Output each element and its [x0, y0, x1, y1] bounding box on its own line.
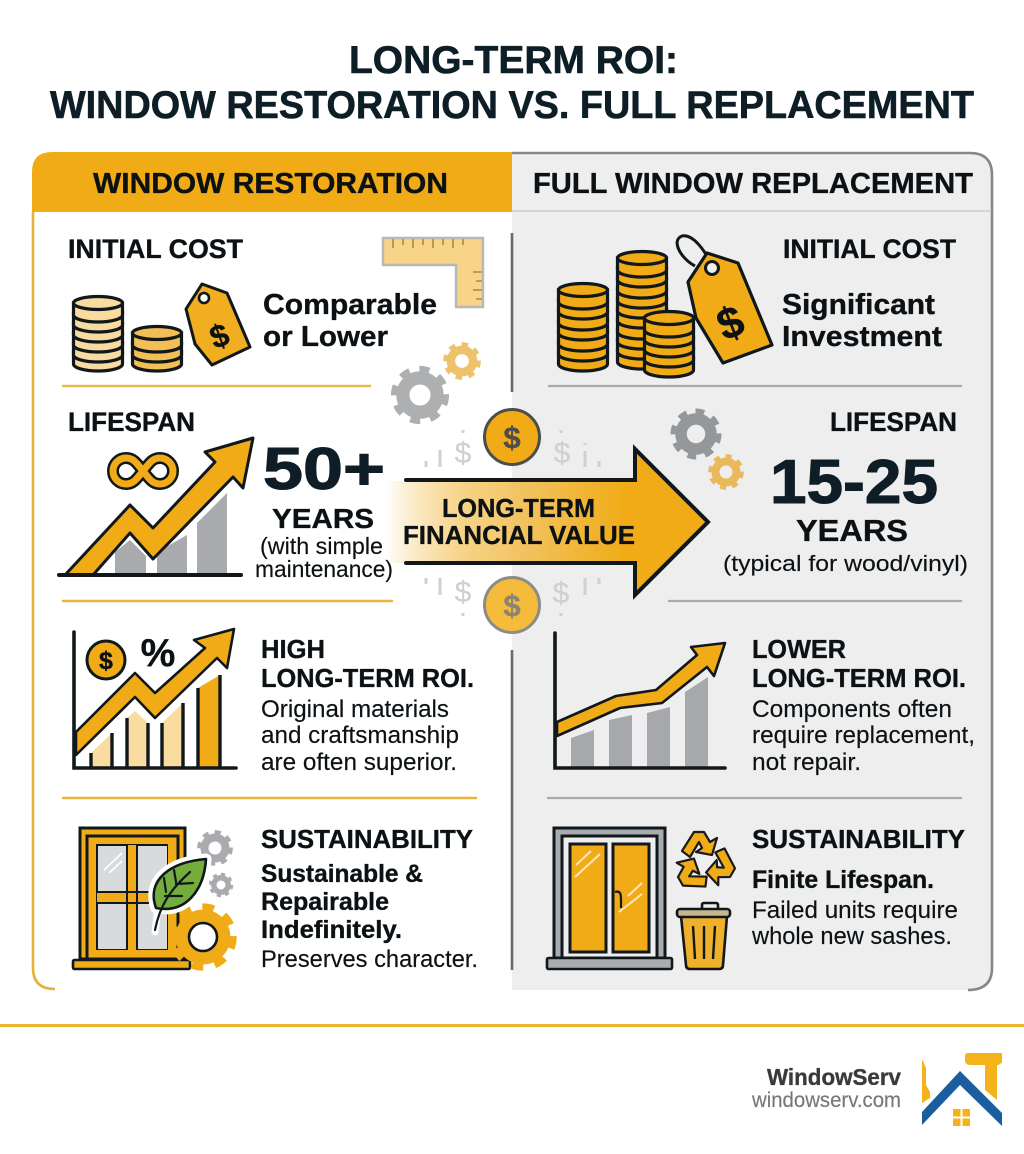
text: high long-term roi: Original materials	[261, 696, 449, 723]
title: LONG-TERM ROI:	[349, 39, 678, 82]
arrow label: LONG-TERM	[442, 493, 595, 523]
coin: top: $	[503, 420, 521, 455]
text: sustainability restoration: Indefinitely.	[261, 916, 402, 944]
icon: grey and gold gears (restoration)	[395, 345, 478, 420]
icon: replacement window	[547, 828, 672, 969]
text: high long-term roi	[261, 634, 474, 776]
stat: 50+ years: 50+	[263, 436, 385, 502]
icon: leaf	[154, 859, 206, 932]
icon: price tag (restoration): $	[205, 316, 234, 356]
arrow shape	[385, 449, 708, 595]
text: lower long-term roi	[752, 634, 975, 776]
text: high long-term roi: LONG-TERM ROI.	[261, 663, 474, 693]
arrow label	[403, 493, 635, 550]
icon: price tag (restoration)	[186, 284, 250, 365]
panel header: window restoration: WINDOW RESTORATION	[93, 168, 448, 200]
stat: 15-25 years: YEARS	[796, 513, 908, 548]
footer brand text: windowserv.com	[751, 1089, 901, 1112]
text: lower long-term roi: not repair.	[752, 749, 861, 776]
text: lower long-term roi: LONG-TERM ROI.	[752, 663, 966, 693]
text: high long-term roi: HIGH	[261, 634, 325, 664]
text: high long-term roi: and craftsmanship	[261, 722, 459, 749]
icon: dollar coin: $	[99, 647, 113, 675]
stat: 50+ years	[255, 436, 393, 582]
text: high long-term roi: are often superior.	[261, 749, 457, 776]
text: significant investment	[782, 289, 942, 353]
text: lower long-term roi: Components often	[752, 696, 952, 723]
chart: high long-term roi	[74, 629, 236, 768]
stat: 50+ years: maintenance)	[255, 556, 393, 582]
text: sustainability replacement: Failed units require	[752, 897, 958, 924]
text: sustainability restoration: SUSTAINABILITY	[261, 824, 473, 854]
title: WINDOW RESTORATION VS. FULL REPLACEMENT	[50, 84, 974, 127]
stat: 50+ years: (with simple	[260, 533, 383, 559]
arrow label: FINANCIAL VALUE	[403, 520, 635, 550]
text: sustainability replacement: Finite Lifespan.	[752, 866, 934, 894]
icon: recycling symbol	[672, 832, 741, 896]
chart: lower long-term roi	[555, 633, 725, 768]
text: comparable or lower	[263, 289, 437, 353]
text: sustainability replacement	[751, 824, 965, 950]
icon: coin stacks (restoration)	[74, 296, 182, 371]
stat: 15-25 years	[723, 448, 968, 576]
faded dollar signs and ticks: $	[554, 437, 571, 470]
heading: restoration lifespan: LIFESPAN	[68, 407, 195, 437]
chart: lifespan growth arrow	[59, 438, 253, 575]
icon: percent sign: %	[141, 632, 175, 675]
text: significant investment: Significant	[782, 289, 935, 321]
stat: 50+ years: YEARS	[272, 503, 374, 534]
icon: gold gear	[174, 908, 232, 966]
icon: grey and gold gears (replacement)	[674, 412, 741, 487]
heading: replacement initial cost: INITIAL COST	[783, 234, 956, 264]
icon: dollar coin	[87, 641, 125, 679]
icon: trash can	[677, 903, 730, 969]
icon: price tag (replacement): $	[710, 296, 751, 351]
icon: carpenter square ruler	[383, 238, 483, 307]
icon: coin stacks (replacement)	[558, 252, 694, 377]
text: significant investment: Investment	[782, 321, 942, 353]
text: sustainability restoration	[261, 824, 478, 973]
footer brand text: WindowServ	[767, 1064, 901, 1090]
stat: 15-25 years: 15-25	[770, 448, 938, 517]
text: sustainability replacement: whole new sashes.	[751, 923, 952, 950]
faded dollar signs and ticks	[426, 430, 599, 616]
coin: bottom	[484, 578, 540, 632]
stat: 15-25 years: (typical for wood/vinyl)	[723, 551, 968, 576]
text: lower long-term roi: LOWER	[752, 634, 846, 664]
text: sustainability restoration: Sustainable &	[261, 860, 423, 888]
text: sustainability replacement: SUSTAINABILITY	[752, 824, 965, 854]
icon: grey gears	[200, 833, 232, 896]
panel header: window restoration	[32, 152, 512, 212]
icon: infinity symbol	[113, 458, 173, 484]
faded dollar signs and ticks: $	[455, 576, 472, 609]
icon: wooden window with leaf and gears	[73, 828, 232, 969]
text: comparable or lower: or Lower	[263, 321, 388, 353]
faded dollar signs and ticks: $	[455, 437, 472, 470]
heading: replacement lifespan: LIFESPAN	[830, 407, 957, 437]
text: comparable or lower: Comparable	[263, 289, 437, 321]
coin: top	[484, 410, 540, 464]
footer rule	[0, 1024, 1024, 1027]
text: sustainability restoration: Repairable	[261, 888, 389, 916]
logo: house and tools	[922, 1053, 1002, 1126]
panel: window restoration	[32, 152, 512, 989]
panel header: full window replacement: FULL WINDOW REPLACEMENT	[533, 168, 973, 200]
coin: bottom: $	[503, 588, 521, 623]
text: sustainability restoration: Preserves character.	[261, 946, 478, 973]
central arrow: long-term financial value	[385, 410, 708, 632]
icon: price tag (replacement)	[677, 236, 772, 363]
faded dollar signs and ticks: $	[553, 577, 570, 610]
title	[50, 39, 974, 127]
text: lower long-term roi: require replacement,	[752, 722, 975, 749]
footer brand text	[751, 1064, 901, 1112]
heading: restoration initial cost: INITIAL COST	[68, 234, 243, 264]
